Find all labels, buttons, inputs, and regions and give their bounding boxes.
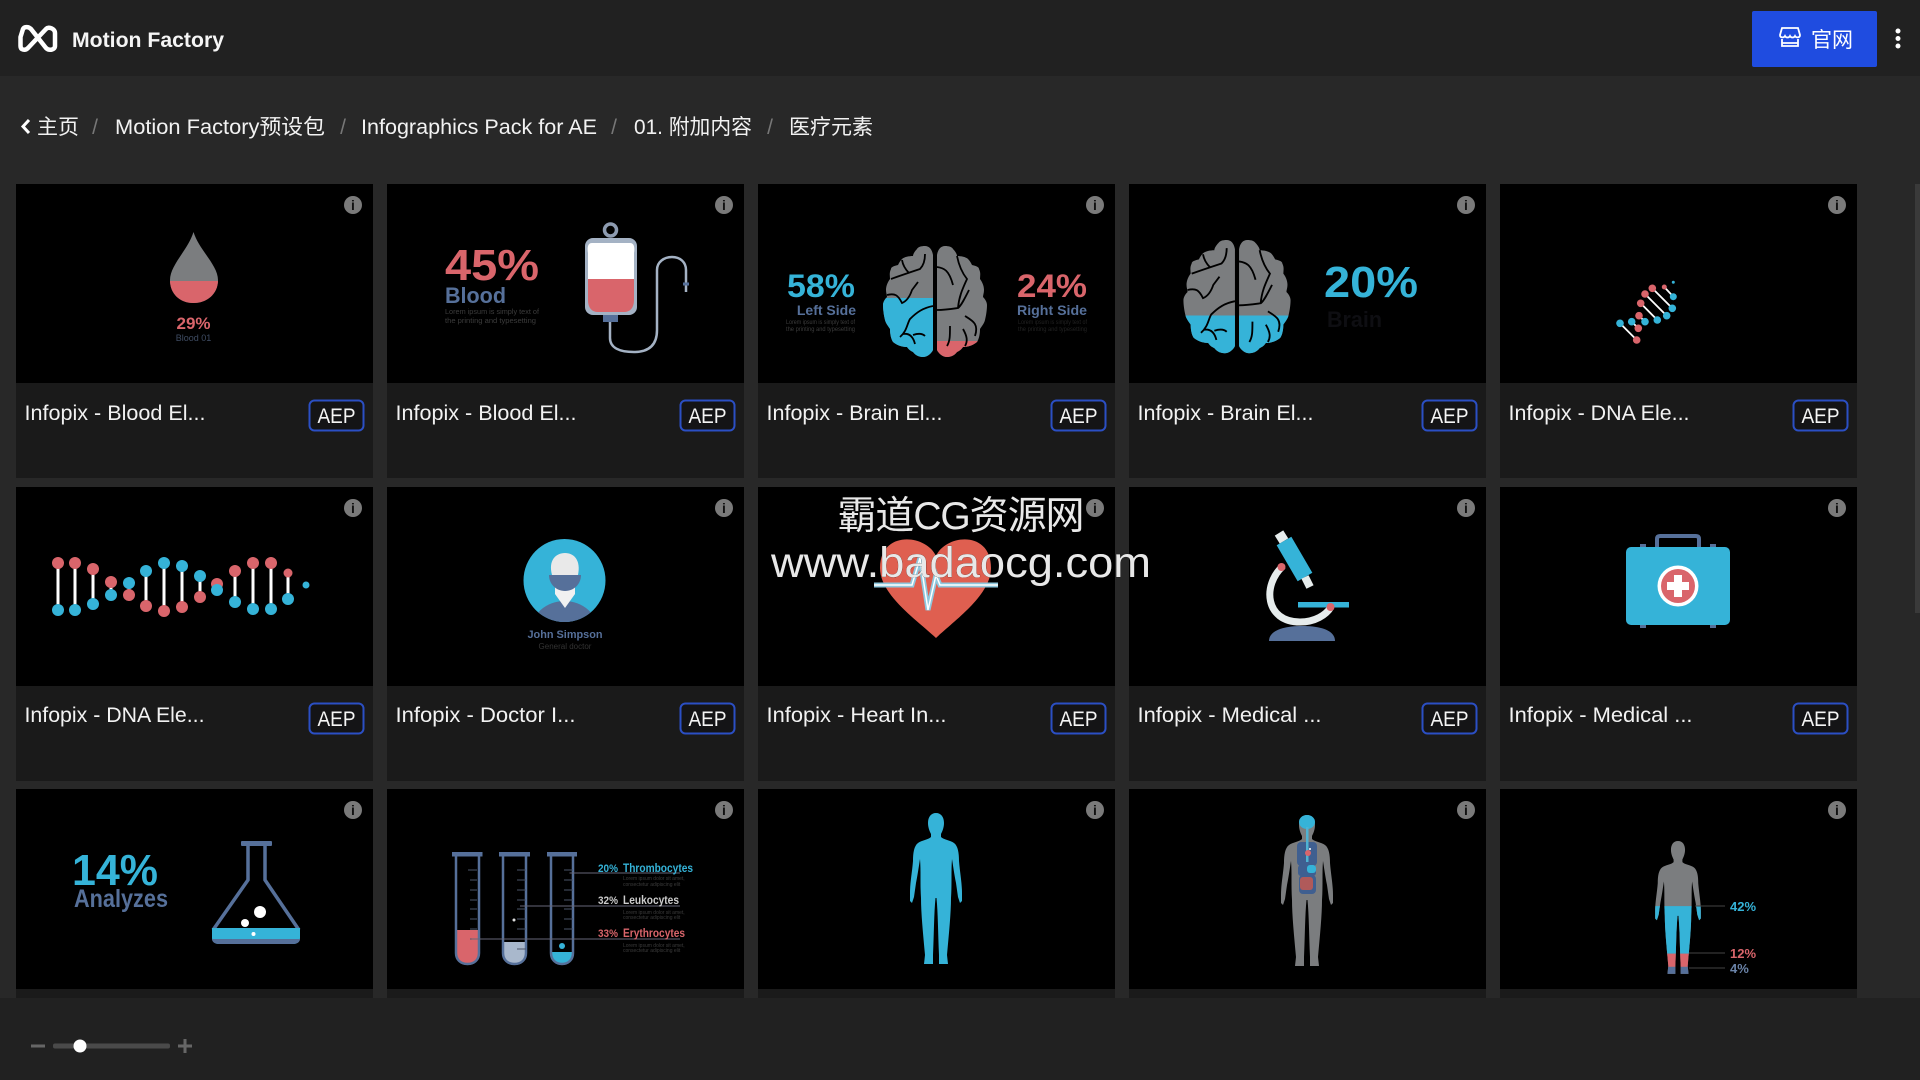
icon: tilted DNA bbox=[1616, 281, 1677, 344]
lines and labels: blood components: consectetur adipiscing elit bbox=[623, 915, 681, 921]
card title: Infopix - Blood El... bbox=[24, 402, 206, 425]
breadcrumb: 主页 bbox=[37, 116, 79, 139]
stat: 20% Brain bbox=[1324, 258, 1418, 332]
badge: AEP: AEP bbox=[688, 708, 726, 731]
icon: info: i bbox=[1835, 500, 1839, 516]
menu dots bbox=[1896, 28, 1900, 48]
icon: info: i bbox=[351, 500, 355, 516]
watermark: www.badaocg.com bbox=[770, 539, 1151, 587]
icon: info: i bbox=[1093, 197, 1097, 213]
badge: AEP bbox=[1052, 400, 1106, 430]
badge: AEP: AEP bbox=[688, 405, 726, 428]
lines and labels: blood components: 20% bbox=[598, 863, 618, 875]
stat: 24% Right Side: 24% bbox=[1017, 268, 1087, 304]
icon: info bbox=[1828, 499, 1846, 517]
stat: 45% Blood: Blood bbox=[445, 283, 506, 308]
icon: blood drop bbox=[170, 232, 218, 303]
panel: card 1 Blood Element bbox=[16, 184, 373, 478]
header bar bbox=[0, 0, 1920, 76]
icon: info: i bbox=[351, 197, 355, 213]
icon: blue human figure bbox=[910, 813, 962, 964]
icon: heart with pulse bbox=[874, 539, 998, 638]
icon: test tubes bbox=[452, 852, 577, 965]
breadcrumb: Motion Factory预设包 bbox=[115, 116, 325, 139]
icon: info: i bbox=[351, 802, 355, 818]
icon: microscope bbox=[1269, 533, 1349, 641]
card title: Infopix - Medical ... bbox=[1508, 704, 1692, 727]
icon: info bbox=[1828, 801, 1846, 819]
badge: AEP: AEP bbox=[318, 405, 356, 428]
icon: info: i bbox=[1464, 500, 1468, 516]
labels: percentages bbox=[1689, 899, 1756, 976]
icon: flask bbox=[212, 841, 300, 944]
doctor role: General doctor bbox=[539, 642, 592, 651]
panel: card 10 Medical case bbox=[1500, 487, 1857, 781]
badge: AEP: AEP bbox=[1060, 405, 1098, 428]
icon: human with organs bbox=[1281, 815, 1333, 966]
labels: percentages: 42% bbox=[1730, 899, 1756, 914]
card title: Infopix - DNA Ele... bbox=[24, 704, 204, 727]
card title: Infopix - DNA Ele... bbox=[1508, 402, 1690, 425]
panel: card 15 Human percentages bbox=[1500, 789, 1857, 998]
icon: info bbox=[715, 801, 733, 819]
icon: first aid case bbox=[1626, 536, 1730, 628]
badge: AEP: AEP bbox=[318, 708, 356, 731]
labels: percentages: 12% bbox=[1730, 946, 1756, 961]
stat: 24% Right Side: Right Side bbox=[1017, 302, 1087, 318]
icon: info bbox=[1086, 196, 1104, 214]
card title: Infopix - Blood El... bbox=[396, 402, 576, 425]
icon: info: i bbox=[1093, 500, 1097, 516]
icon: info: i bbox=[722, 197, 726, 213]
stat: 45% Blood bbox=[445, 241, 540, 325]
icon: brain bottom filled bbox=[1183, 240, 1291, 353]
badge: AEP bbox=[680, 704, 734, 734]
card title: Infopix - Heart In... bbox=[766, 704, 946, 727]
icon: info bbox=[715, 499, 733, 517]
icon: info bbox=[1828, 196, 1846, 214]
badge: AEP bbox=[1422, 704, 1476, 734]
badge: AEP: AEP bbox=[1802, 708, 1840, 731]
stat: 29%: 29% bbox=[176, 314, 211, 333]
brand name: Motion Factory bbox=[72, 29, 224, 52]
breadcrumb: Infographics Pack for AE bbox=[361, 116, 597, 139]
panel: card 11 Flask bbox=[16, 789, 373, 998]
icon: info bbox=[344, 801, 362, 819]
icon: IV blood bag bbox=[585, 224, 689, 352]
breadcrumb: 医疗元素 bbox=[789, 116, 873, 139]
stat: 45% Blood: Lorem ipsum is simply text of bbox=[445, 307, 540, 316]
card title: Infopix - Brain El... bbox=[766, 402, 942, 425]
breadcrumb: / bbox=[92, 116, 98, 139]
stat: 24% Right Side: the printing and typesetting bbox=[1018, 327, 1087, 333]
breadcrumb: / bbox=[611, 116, 617, 139]
badge: AEP: AEP bbox=[1060, 708, 1098, 731]
panel: card 9 Microscope bbox=[1129, 487, 1486, 781]
stat: 24% Right Side bbox=[1017, 268, 1087, 333]
watermark: 霸道CG资源网 bbox=[838, 495, 1084, 538]
badge: AEP bbox=[1052, 704, 1106, 734]
icon: info: i bbox=[1835, 197, 1839, 213]
icon: info bbox=[1457, 196, 1475, 214]
stat: 20% Brain: 20% bbox=[1324, 258, 1418, 307]
panel: card 4 Brain 20% bbox=[1129, 184, 1486, 478]
lines and labels: blood components: Lorem ipsum dolor sit amet, bbox=[623, 876, 685, 882]
breadcrumb: / bbox=[340, 116, 346, 139]
badge: AEP: AEP bbox=[1802, 405, 1840, 428]
icon: doctor avatar bbox=[524, 539, 606, 622]
stat: 14% Analyzes bbox=[72, 846, 168, 913]
stat: 45% Blood: the printing and typesetting bbox=[445, 316, 536, 325]
panel: card 7 Doctor bbox=[387, 487, 744, 781]
lines and labels: blood components: Erythrocytes bbox=[623, 926, 685, 940]
panel: card 6 DNA strand bbox=[16, 487, 373, 781]
lines and labels: blood components: 33% bbox=[598, 928, 618, 940]
icon: brain left and right bbox=[883, 246, 987, 357]
panel: card 13 Human blue bbox=[758, 789, 1115, 998]
stat: 58% Left Side bbox=[786, 268, 856, 333]
breadcrumb: 01. 附加内容 bbox=[634, 116, 752, 139]
breadcrumb bbox=[23, 116, 873, 139]
watermark bbox=[770, 495, 1151, 587]
stat: 58% Left Side: 58% bbox=[787, 268, 855, 304]
scrollbar bbox=[1915, 184, 1920, 613]
panel: card 8 Heart bbox=[758, 487, 1115, 781]
stat: 58% Left Side: Left Side bbox=[797, 302, 856, 318]
button: official site bbox=[1752, 11, 1877, 67]
lines and labels: blood components: consectetur adipiscing elit bbox=[623, 882, 681, 888]
icon: info bbox=[715, 196, 733, 214]
icon: info bbox=[344, 499, 362, 517]
badge: AEP bbox=[1422, 400, 1476, 430]
lines and labels: blood components: Thrombocytes bbox=[623, 861, 693, 875]
stat: 58% Left Side: the printing and typesetting bbox=[786, 327, 855, 333]
panel: card 3 Brain Sides bbox=[758, 184, 1115, 478]
icon: info: i bbox=[1835, 802, 1839, 818]
icon: info: i bbox=[722, 500, 726, 516]
icon: info: i bbox=[722, 802, 726, 818]
icon: info bbox=[1086, 801, 1104, 819]
card title: Infopix - Doctor I... bbox=[396, 704, 576, 727]
icon: info: i bbox=[1093, 802, 1097, 818]
stat: 24% Right Side: Lorem ipsum is simply text of bbox=[1018, 320, 1087, 326]
panel: card 12 Test tubes bbox=[387, 789, 744, 998]
badge: AEP bbox=[680, 400, 734, 430]
labels: percentages: 4% bbox=[1730, 961, 1749, 976]
lines and labels: blood components: 32% bbox=[598, 895, 618, 907]
stat: 58% Left Side: Lorem ipsum is simply text of bbox=[786, 320, 855, 326]
badge: AEP: AEP bbox=[1430, 405, 1468, 428]
stat: 20% Brain: Brain bbox=[1327, 307, 1382, 332]
footer with zoom slider bbox=[0, 998, 1920, 1080]
badge: AEP bbox=[1794, 704, 1848, 734]
lines and labels: blood components: Leukocytes bbox=[623, 893, 679, 907]
panel: card 2 Blood Bag bbox=[387, 184, 744, 478]
icon: info: i bbox=[1464, 197, 1468, 213]
panel: card 14 Human organs bbox=[1129, 789, 1486, 998]
panel: card 5 DNA small bbox=[1500, 184, 1857, 478]
lines and labels: blood components bbox=[472, 861, 693, 954]
badge: AEP: AEP bbox=[1430, 708, 1468, 731]
icon: info bbox=[1086, 499, 1104, 517]
lines and labels: blood components: Lorem ipsum dolor sit amet, bbox=[623, 943, 685, 949]
breadcrumb: / bbox=[767, 116, 773, 139]
stat: 14% Analyzes: Analyzes bbox=[74, 885, 168, 913]
icon: info bbox=[1457, 499, 1475, 517]
badge: AEP bbox=[310, 400, 364, 430]
icon: info bbox=[1457, 801, 1475, 819]
icon: info: i bbox=[1464, 802, 1468, 818]
caption: Blood 01: Blood 01 bbox=[176, 333, 211, 343]
stat: 45% Blood: 45% bbox=[445, 241, 539, 290]
icon: human percentage fill bbox=[1655, 841, 1701, 974]
lines and labels: blood components: Lorem ipsum dolor sit amet, bbox=[623, 910, 685, 916]
doctor name: John Simpson bbox=[528, 629, 603, 641]
logo bbox=[20, 27, 55, 50]
icon: info bbox=[344, 196, 362, 214]
stat: 14% Analyzes: 14% bbox=[72, 846, 158, 895]
badge: AEP bbox=[1794, 400, 1848, 430]
card title: Infopix - Medical ... bbox=[1138, 704, 1322, 727]
icon: horizontal DNA bbox=[52, 557, 310, 617]
lines and labels: blood components: consectetur adipiscing elit bbox=[623, 948, 681, 954]
badge: AEP bbox=[310, 704, 364, 734]
button: official site: 官网 bbox=[1811, 29, 1853, 52]
card title: Infopix - Brain El... bbox=[1138, 402, 1314, 425]
